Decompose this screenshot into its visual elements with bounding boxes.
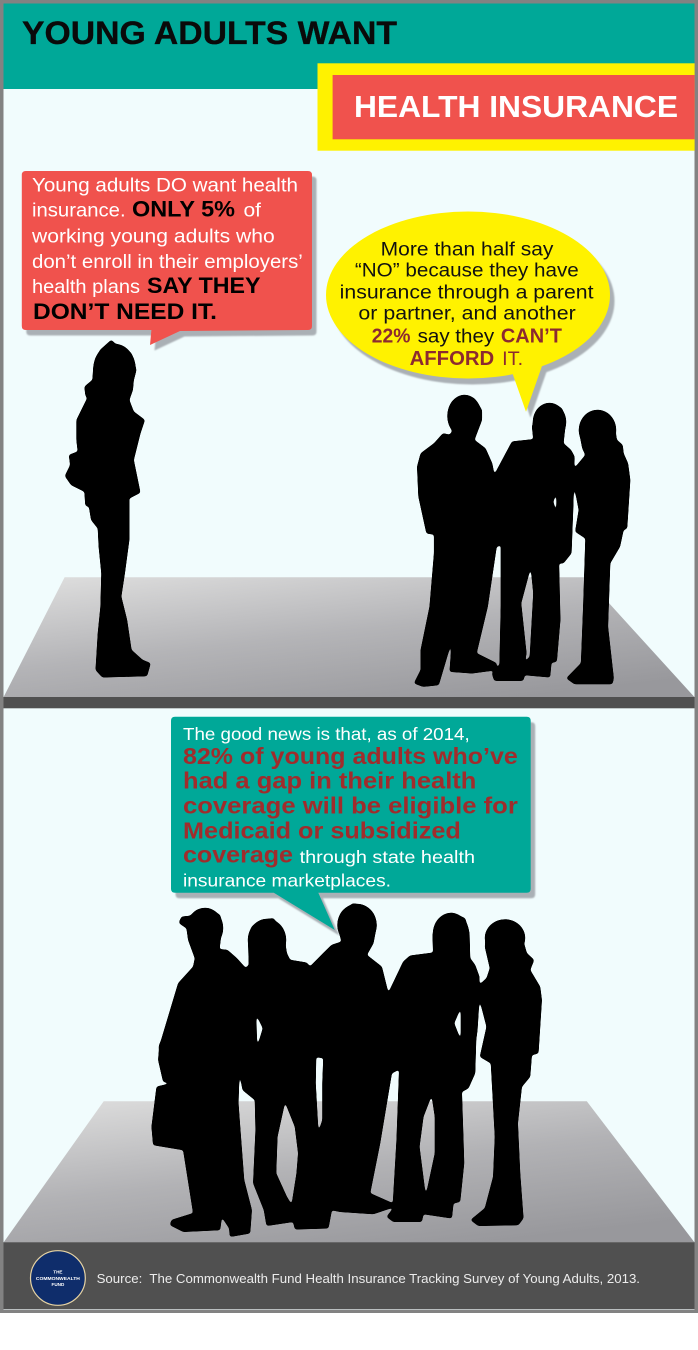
teal title band [4,4,694,89]
teal bubble text: The good news is that, as of 2014, [183,724,470,744]
red bubble text: health plans [32,276,140,298]
callout: yellow speech bubble [326,212,614,418]
red bubble text: working young adults who [31,225,275,247]
teal bubble text: coverage [183,841,293,867]
teal bubble text: through state health [300,847,475,867]
yellow bubble text: insurance through a parent [340,282,594,303]
yellow bubble text: 22% [372,325,411,347]
logo: The Commonwealth Fund: COMMONWEALTH [36,1276,81,1281]
yellow bubble text: “NO” because they have [355,261,579,282]
teal bubble text [183,724,518,891]
red title box [333,75,695,139]
red bubble text: don’t enroll in their employers’ [32,251,303,273]
teal bubble text: coverage will be eligible for [183,792,518,818]
subtitle: HEALTH INSURANCE [354,89,678,124]
yellow bubble text: say they [418,326,495,347]
yellow bubble text: More than half say [381,240,554,261]
red bubble text: insurance. [32,200,126,222]
yellow frame [318,63,695,151]
yellow bubble text: AFFORD [410,348,494,370]
logo: The Commonwealth Fund: THE [53,1270,62,1274]
teal bubble text: insurance marketplaces. [183,871,391,891]
red bubble text: DON’T NEED IT. [33,299,217,324]
floor: lower scene [4,1101,695,1242]
silhouette: single woman [65,340,151,677]
teal bubble text: Medicaid or subsidized [183,817,461,843]
callout: red speech bubble [22,171,317,350]
logo: The Commonwealth Fund: FUND [52,1282,65,1287]
source text: Source: The Commonwealth Fund Health Insurance Tracking Survey of Young Adults, 2013. [97,1271,640,1286]
floor: upper scene [4,577,695,697]
footer bar [4,1242,694,1309]
teal bubble text: 82% of young adults who’ve [183,743,518,769]
title: YOUNG ADULTS WANT [22,15,397,51]
yellow bubble text [340,240,594,370]
teal bubble text: had a gap in their health [183,767,476,793]
panel: header [4,4,695,151]
yellow bubble text: CAN’T [501,325,562,347]
yellow bubble text: IT. [502,349,523,370]
red bubble text: SAY THEY [147,273,261,298]
floor edge bar [4,697,694,708]
red bubble text: Young adults DO want health [32,175,298,197]
silhouette: group of three [414,395,630,687]
panel: footer [4,1242,694,1309]
logo: The Commonwealth Fund [31,1251,85,1305]
yellow bubble text: or partner, and another [358,303,576,324]
red bubble text: ONLY 5% [132,197,235,222]
silhouette: group of five [152,903,542,1237]
red bubble text: of [244,200,262,222]
callout: teal speech bubble [171,717,535,936]
red bubble text [31,175,303,324]
